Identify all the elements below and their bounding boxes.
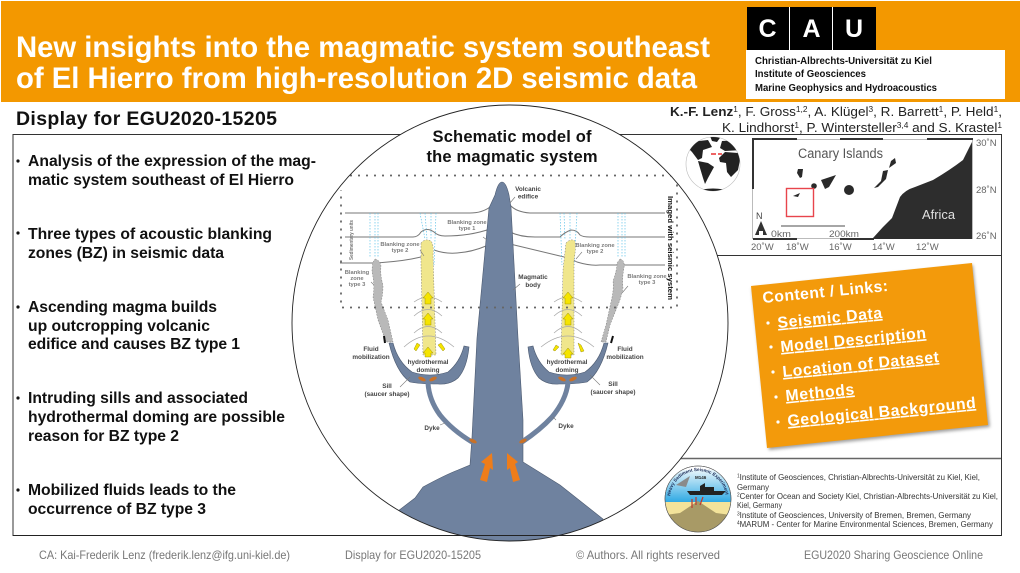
affiliations: 2 <box>737 492 740 498</box>
panel: content and links: Methods <box>785 381 855 405</box>
CAU logo: A <box>802 15 821 43</box>
authors: 1 <box>733 105 738 114</box>
panel: key points: Ascending magma builds <box>28 299 217 316</box>
dykes <box>428 383 472 442</box>
schematic labels: type 3 <box>639 280 656 286</box>
affiliations: 1 <box>737 474 740 480</box>
icon: globe <box>686 135 742 194</box>
map: Canary Islands: 18˚W <box>786 242 809 253</box>
islands <box>793 158 896 197</box>
map: Canary Islands: 14˚W <box>872 242 895 253</box>
map: Canary Islands: 20˚W <box>751 242 774 253</box>
map: Canary Islands: 12˚W <box>916 242 939 253</box>
schematic labels: type 3 <box>349 282 366 288</box>
authors <box>670 104 1003 135</box>
panel: schematic model circle: hydrothermal <box>408 359 449 366</box>
panel: key points: Analysis of the expression of the mag- <box>28 153 316 170</box>
map: Canary Islands: 0km <box>771 229 791 239</box>
CAU logo: Institute of Geosciences <box>755 68 866 80</box>
panel: key points: Intruding sills and associated <box>28 390 248 407</box>
fluid mobilization markers <box>384 336 385 343</box>
panel: key points: matic system southeast of El Hierro <box>28 172 294 189</box>
footer <box>39 548 983 562</box>
panel: key points <box>16 153 316 518</box>
schematic heading: Schematic model of <box>432 128 592 146</box>
panel: schematic model circle: (saucer shape) <box>364 391 410 398</box>
panel: key points: Three types of acoustic blanking <box>28 226 272 243</box>
authors: , P. Wintersteller <box>799 120 897 135</box>
panel: schematic model circle: Fluid <box>363 346 379 353</box>
schematic labels: type 2 <box>587 249 603 255</box>
affiliations: Kiel, Germany <box>737 500 783 510</box>
blanking zone dashed lines <box>370 213 625 265</box>
panel: schematic model circle: Sill <box>382 383 392 390</box>
schematic labels <box>345 220 667 288</box>
panel: content and links: Content / Links: <box>762 278 889 307</box>
panel: schematic model circle: doming <box>416 367 440 374</box>
map: Canary Islands <box>751 138 997 253</box>
bottom line over circle <box>13 534 1001 536</box>
panel: key points: hydrothermal doming are possible <box>28 409 285 426</box>
orange sill tips <box>418 376 577 444</box>
panel: schematic model circle: mobilization <box>606 354 644 361</box>
panel: content and links: Geological Background <box>787 395 977 430</box>
CAU logo: Christian-Albrechts-Universität zu Kiel <box>755 55 932 67</box>
authors: , F. Gross <box>738 104 796 119</box>
left sill <box>389 343 469 384</box>
authors: 1 <box>997 121 1003 130</box>
authors: and S. Krastel <box>908 120 997 135</box>
panel: key points: Mobilized fluids leads to the <box>28 482 236 499</box>
authors: 1,2 <box>796 105 808 114</box>
affiliations <box>737 472 998 529</box>
affiliations: Germany <box>737 482 770 492</box>
panel: schematic model circle: Dyke <box>424 425 440 432</box>
map: Canary Islands: N <box>756 211 762 221</box>
schematic labels: Blanking <box>345 270 370 276</box>
panel: key points: up outcropping volcanic <box>28 318 210 335</box>
panel: content and links: Seismic Data <box>777 305 883 332</box>
affiliations: Center for Ocean and Society Kiel, Christian-Albrechts-Universität zu Kiel, <box>740 491 998 501</box>
footer: CA: Kai-Frederik Lenz (frederik.lenz@ifg.uni-kiel.de) <box>39 548 290 562</box>
authors: 3 <box>869 105 874 114</box>
panel: schematic model circle: mobilization <box>352 354 390 361</box>
panel: schematic model circle: hydrothermal <box>547 359 588 366</box>
title: New insights into the magmatic system southeast <box>16 31 710 64</box>
icon: cruise badge <box>664 466 732 532</box>
authors: 3,4 <box>897 121 909 130</box>
schematic heading: the magmatic system <box>426 148 598 166</box>
doming arcs <box>404 297 594 347</box>
yellow blanking zones type 2 <box>421 240 436 355</box>
rotated imaged label: Imaged with seismic system <box>666 196 675 300</box>
panel: content and links <box>751 263 990 450</box>
header banner <box>1 1 1020 102</box>
panel: schematic model circle: (saucer shape) <box>590 389 636 396</box>
authors: , A. Klügel <box>807 104 869 119</box>
footer: Display for EGU2020-15205 <box>345 548 481 562</box>
panel: content and links: Model Description <box>780 325 927 356</box>
footer: © Authors. All rights reserved <box>576 548 720 562</box>
schematic labels: zone <box>350 276 364 282</box>
map: Canary Islands: Africa <box>922 207 956 222</box>
gray blanking zones type 3 <box>372 259 393 342</box>
map frame ticks <box>752 139 973 239</box>
panel: key points: reason for BZ type 2 <box>28 428 179 445</box>
authors: K.-F. Lenz <box>670 104 734 119</box>
strata lines <box>340 205 665 265</box>
panel: key points: zones (BZ) in seismic data <box>28 245 224 262</box>
imaged area dotted box <box>341 176 677 308</box>
schematic labels: Blanking zone <box>447 220 487 226</box>
map: Canary Islands: 28˚N <box>976 185 997 196</box>
CAU logo: C <box>758 15 777 43</box>
frame lines <box>13 134 1002 536</box>
panel: schematic model circle: doming <box>555 367 579 374</box>
panel: schematic model circle: body <box>525 282 541 289</box>
affiliations: 3 <box>737 512 740 518</box>
magmatic body <box>398 182 603 560</box>
panel: schematic model circle <box>292 105 728 560</box>
schematic labels: type 1 <box>459 226 476 232</box>
authors: , <box>998 104 1002 119</box>
panel: schematic model circle: Volcanic <box>515 186 541 193</box>
panel: schematic model circle: edifice <box>518 194 539 200</box>
map: Canary Islands: Canary Islands <box>798 146 883 161</box>
icon: cruise badge: Heavy Sediment Seismic Experiment <box>667 468 729 496</box>
map: Canary Islands: 200km <box>829 229 859 239</box>
right sill <box>528 343 608 384</box>
panel: schematic model circle: Dyke <box>558 423 574 430</box>
schematic labels: Blanking zone <box>627 274 667 280</box>
panel: key points: edifice and causes BZ type 1 <box>28 336 240 353</box>
schematic labels: type 2 <box>392 248 408 254</box>
footer: EGU2020 Sharing Geoscience Online <box>804 548 983 562</box>
title <box>16 31 710 95</box>
display label: Display for EGU2020-15205 <box>16 108 277 130</box>
CAU logo <box>746 7 1005 99</box>
title: of El Hierro from high-resolution 2D seismic data <box>16 62 698 95</box>
map: Canary Islands: 30˚N <box>976 138 997 149</box>
orange arrows <box>480 453 520 482</box>
label leader lines <box>371 197 628 425</box>
affiliations: MARUM - Center for Marine Environmental Sciences, Bremen, Germany <box>740 519 994 529</box>
panel: schematic model circle: Fluid <box>617 346 633 353</box>
authors: , R. Barrett <box>873 104 939 119</box>
rotated sedimentary label: Sedimentary units <box>349 220 355 260</box>
authors: 1 <box>939 105 944 114</box>
map: Canary Islands: 16˚W <box>829 242 852 253</box>
schematic labels: Blanking zone <box>575 243 615 249</box>
panel: schematic model circle: Magmatic <box>518 274 548 281</box>
authors: 1 <box>994 105 999 114</box>
authors: K. Lindhorst <box>722 120 791 135</box>
authors: , P. Held <box>943 104 994 119</box>
icon: cruise badge: M146 <box>695 475 707 480</box>
CAU logo: Marine Geophysics and Hydroacoustics <box>755 82 937 94</box>
affiliations: Institute of Geosciences, University of Bremen, Bremen, Germany <box>740 510 972 520</box>
panel: schematic model circle: Sill <box>608 381 618 388</box>
panel: content and links: Location of Dataset <box>782 349 940 381</box>
schematic heading <box>426 128 598 166</box>
CAU logo: U <box>845 15 863 43</box>
yellow arrows <box>414 292 584 358</box>
affiliations: Institute of Geosciences, Christian-Albrechts-Universität zu Kiel, Kiel, <box>740 472 980 482</box>
map: Canary Islands: 26˚N <box>976 231 997 242</box>
affiliations: 4 <box>737 520 740 526</box>
authors: 1 <box>794 121 800 130</box>
panel: key points: occurrence of BZ type 3 <box>28 501 206 518</box>
schematic labels: Blanking zone <box>380 242 420 248</box>
